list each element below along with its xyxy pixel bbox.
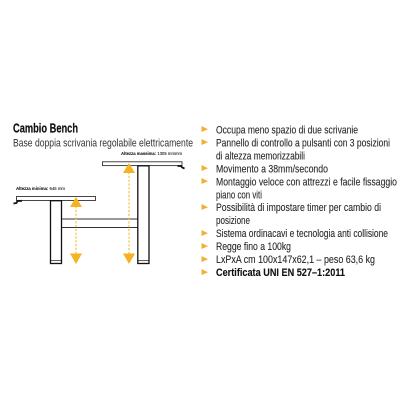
right control handle (178, 166, 184, 169)
arrow: minimum height (70, 197, 82, 264)
bullet: control panel: di altezza memorizzabili (216, 150, 305, 162)
label: maximum height: Altezza massima: 1305 mmmm (121, 151, 182, 156)
bullet: timer (202, 202, 381, 227)
bullet: control panel (202, 138, 390, 162)
feature list (202, 124, 397, 279)
bullet: certification: Certificata UNI EN 527–1:2011 (216, 267, 345, 279)
bullet: assembly (202, 176, 397, 202)
crossbars (61, 219, 138, 228)
arrow: maximum height (123, 163, 135, 264)
subtitle: Base doppia scrivania regolabile elettricamente (13, 138, 193, 150)
bullet: space: Occupa meno spazio di due scrivanie (216, 124, 358, 136)
title: Cambio Bench (13, 122, 78, 136)
right desk top (102, 162, 182, 166)
bullet: dimensions: LxPxA cm 100x147x62,1 – peso 63,6 kg (216, 254, 375, 266)
left control handle (14, 201, 22, 204)
bullet: timer: posizione (216, 215, 250, 227)
left leg (50, 201, 62, 264)
bullet: speed: Movimento a 38mm/secondo (216, 164, 328, 176)
left desk top (16, 196, 96, 200)
bullet: assembly: piano con viti (216, 190, 262, 202)
label: minimum height: Altezza minima: 645 mm (16, 186, 65, 191)
desk diagram (14, 162, 184, 264)
right leg (138, 166, 149, 264)
bullet: load: Regge fino a 100kg (216, 241, 291, 253)
